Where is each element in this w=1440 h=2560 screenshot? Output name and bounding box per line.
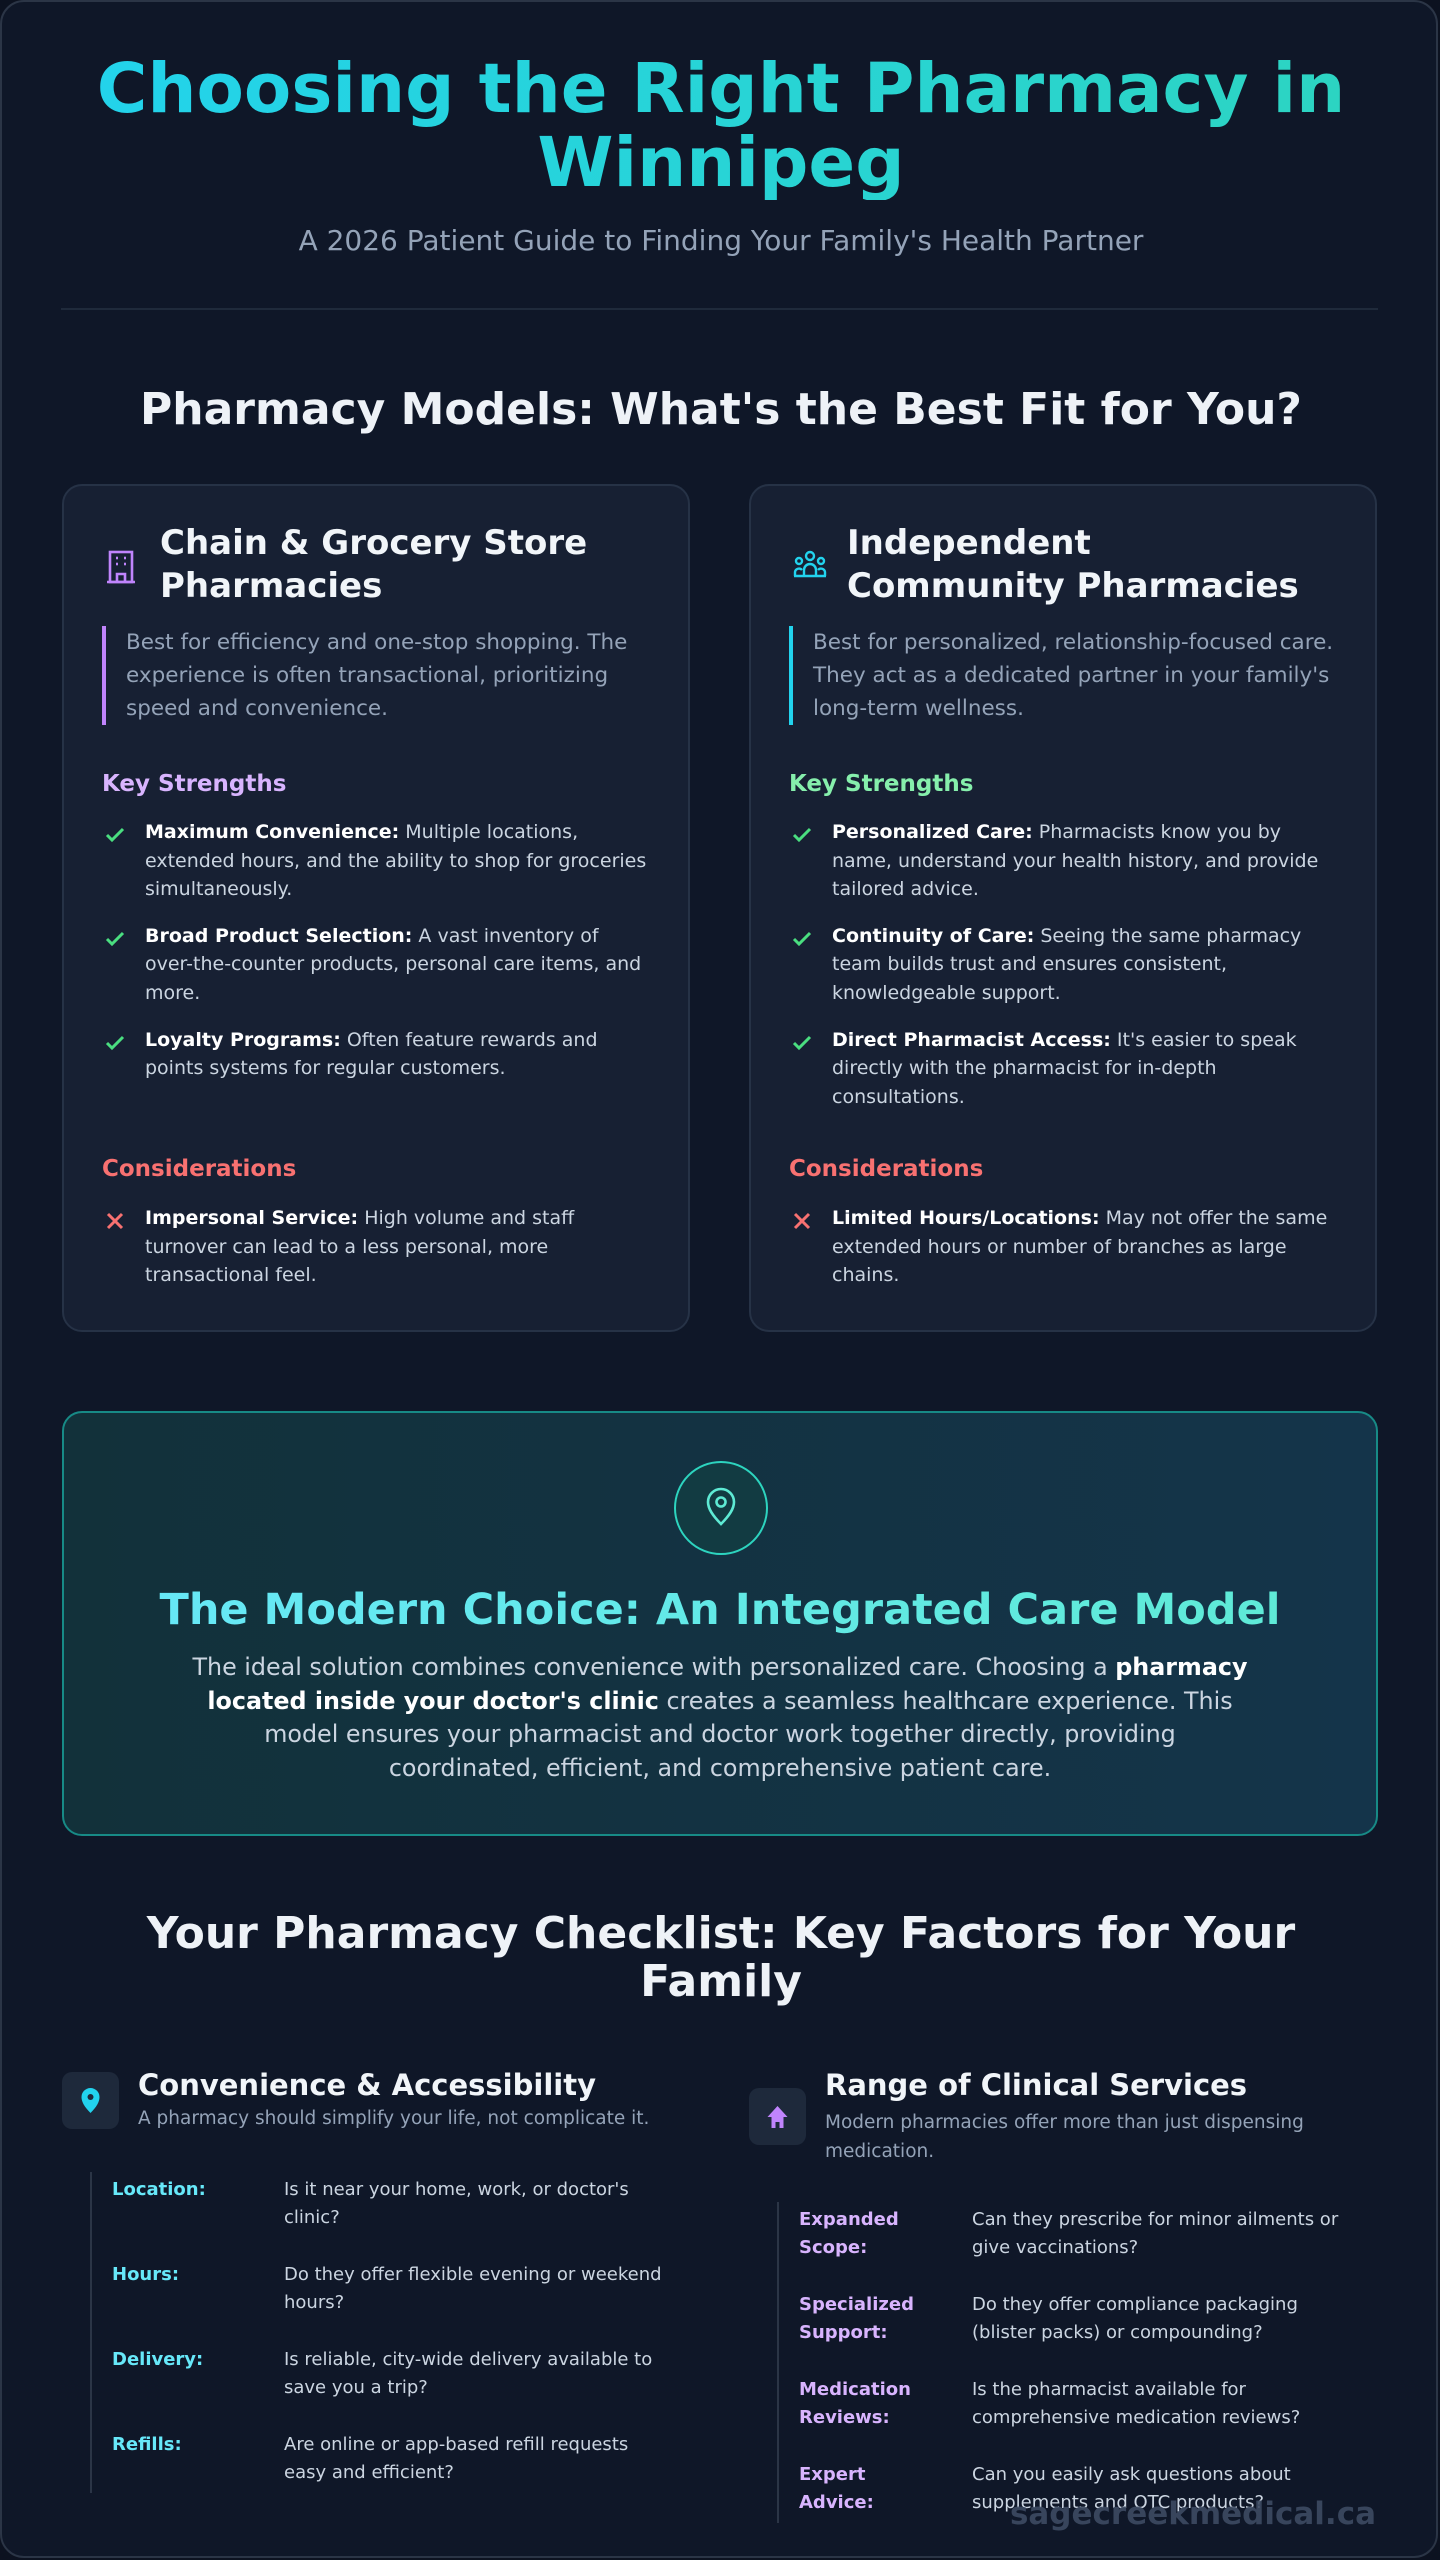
checklist rows: Advice:	[799, 2492, 874, 2513]
checklist rows: Can they prescribe for minor ailments or	[972, 2209, 1338, 2230]
panel: modern choice callout	[62, 1411, 1378, 1836]
checklist rows: Scope:	[799, 2237, 867, 2258]
checklist rows: hours?	[284, 2292, 344, 2313]
callout text: located inside your doctor's clinic creates a seamless healthcare experience. This	[207, 1686, 1233, 1714]
card title: Community Pharmacies	[847, 566, 1299, 606]
callout text	[192, 1653, 1248, 1782]
checklist rows	[777, 2202, 1387, 2523]
heading: checklist	[146, 1908, 1296, 2007]
description: Best for personalized, relationship-focused care. They act as a dedicated partner in your family's long-term wellness.	[813, 630, 1333, 721]
checklist rows: clinic?	[284, 2207, 340, 2228]
column subtitle: Modern pharmacies offer more than just dispensing medication.	[825, 2112, 1304, 2162]
list: strengths: Direct Pharmacist Access: It's easier to speak directly with the pharmacist for in-depth consultations.	[832, 1029, 1297, 1108]
checklist rows: Reviews:	[799, 2407, 890, 2428]
checklist rows: comprehensive medication reviews?	[972, 2407, 1300, 2428]
checklist rows: Specialized	[799, 2294, 914, 2315]
list: considerations: Limited Hours/Locations: May not offer the same extended hours or number of branches as large chains.	[832, 1207, 1327, 1286]
list: considerations: Impersonal Service: High volume and staff turnover can lead to a less personal, more transactional feel.	[145, 1207, 574, 1286]
checklist rows: Location:	[112, 2179, 206, 2200]
list: strengths: Continuity of Care: Seeing the same pharmacy team builds trust and ensures consistent, knowledgeable support.	[832, 925, 1301, 1004]
checklist rows: save you a trip?	[284, 2377, 428, 2398]
callout text: The ideal solution combines convenience with personalized care. Choosing a pharmacy	[192, 1653, 1248, 1681]
heading: key strengths: Key Strengths	[102, 771, 286, 797]
list: strengths: Broad Product Selection: A vast inventory of over-the-counter products, personal care items, and more.	[145, 925, 641, 1004]
checklist rows: Delivery:	[112, 2349, 203, 2370]
checklist rows: supplements and OTC products?	[972, 2492, 1264, 2513]
checklist rows: Is reliable, city-wide delivery available to	[284, 2349, 652, 2370]
title	[2, 52, 1440, 200]
checklist rows: Do they offer compliance packaging	[972, 2294, 1298, 2315]
checklist rows: Medication	[799, 2379, 911, 2400]
checklist rows: Is the pharmacist available for	[972, 2379, 1246, 2400]
description: Best for efficiency and one-stop shopping. The experience is often transactional, prioritizing speed and convenience.	[126, 630, 627, 721]
checklist rows: easy and efficient?	[284, 2462, 454, 2483]
card title: Chain & Grocery Store	[160, 523, 587, 563]
heading: considerations: Considerations	[102, 1156, 296, 1182]
list: strengths: Personalized Care: Pharmacists know you by name, understand your health history, and provide tailored advice.	[832, 821, 1318, 900]
list: strengths: Maximum Convenience: Multiple locations, extended hours, and the ability to shop for groceries simultaneously.	[145, 821, 646, 900]
column title: Convenience & Accessibility	[138, 2068, 596, 2102]
title: Choosing the Right Pharmacy in	[97, 49, 1345, 129]
column subtitle: A pharmacy should simplify your life, not complicate it.	[138, 2108, 649, 2129]
panel: chain pharmacies	[62, 484, 690, 1332]
checklist rows: Refills:	[112, 2434, 182, 2455]
icon: pin box	[62, 2072, 119, 2129]
icon: house box	[749, 2088, 806, 2145]
icon: people	[794, 550, 826, 578]
callout text: coordinated, efficient, and comprehensive patient care.	[389, 1754, 1051, 1782]
subtitle: A 2026 Patient Guide to Finding Your Family's Health Partner	[299, 224, 1143, 257]
checklist rows	[90, 2172, 700, 2493]
card title: Pharmacies	[160, 566, 382, 606]
heading: checklist: Family	[640, 1956, 802, 2007]
watermark: sagecreekmedical.ca	[1010, 2496, 1376, 2532]
panel: convenience & accessibility	[62, 2068, 662, 2493]
list: strengths: Loyalty Programs: Often feature rewards and points systems for regular customers.	[145, 1029, 598, 1079]
heading: key strengths: Key Strengths	[789, 771, 973, 797]
card title: Independent	[847, 523, 1091, 563]
column title: Range of Clinical Services	[825, 2068, 1247, 2102]
checklist rows: Do they offer flexible evening or weekend	[284, 2264, 662, 2285]
checklist rows: Hours:	[112, 2264, 179, 2285]
list: strengths	[106, 821, 646, 1079]
heading: checklist: Your Pharmacy Checklist: Key Factors for Your	[147, 1908, 1295, 1959]
heading: considerations: Considerations	[789, 1156, 983, 1182]
card title	[847, 523, 1299, 606]
checklist rows: Is it near your home, work, or doctor's	[284, 2179, 629, 2200]
checklist rows: Support:	[799, 2322, 888, 2343]
checklist rows: (blister packs) or compounding?	[972, 2322, 1263, 2343]
callout title: The Modern Choice: An Integrated Care Model	[159, 1585, 1280, 1635]
checklist rows: Are online or app-based refill requests	[284, 2434, 628, 2455]
heading: pharmacy models: Pharmacy Models: What's the Best Fit for You?	[140, 384, 1302, 435]
callout text: model ensures your pharmacist and doctor work together directly, providing	[264, 1720, 1176, 1748]
card title	[160, 523, 587, 606]
list: strengths	[793, 821, 1318, 1108]
panel: independent pharmacies	[749, 484, 1377, 1332]
title: Winnipeg	[537, 123, 905, 203]
checklist rows: Expanded	[799, 2209, 899, 2230]
checklist rows: Can you easily ask questions about	[972, 2464, 1291, 2485]
checklist rows: give vaccinations?	[972, 2237, 1138, 2258]
icon: location pin circle	[674, 1461, 768, 1555]
checklist rows: Expert	[799, 2464, 865, 2485]
panel: clinical services	[749, 2068, 1338, 2523]
icon: building	[107, 550, 135, 584]
